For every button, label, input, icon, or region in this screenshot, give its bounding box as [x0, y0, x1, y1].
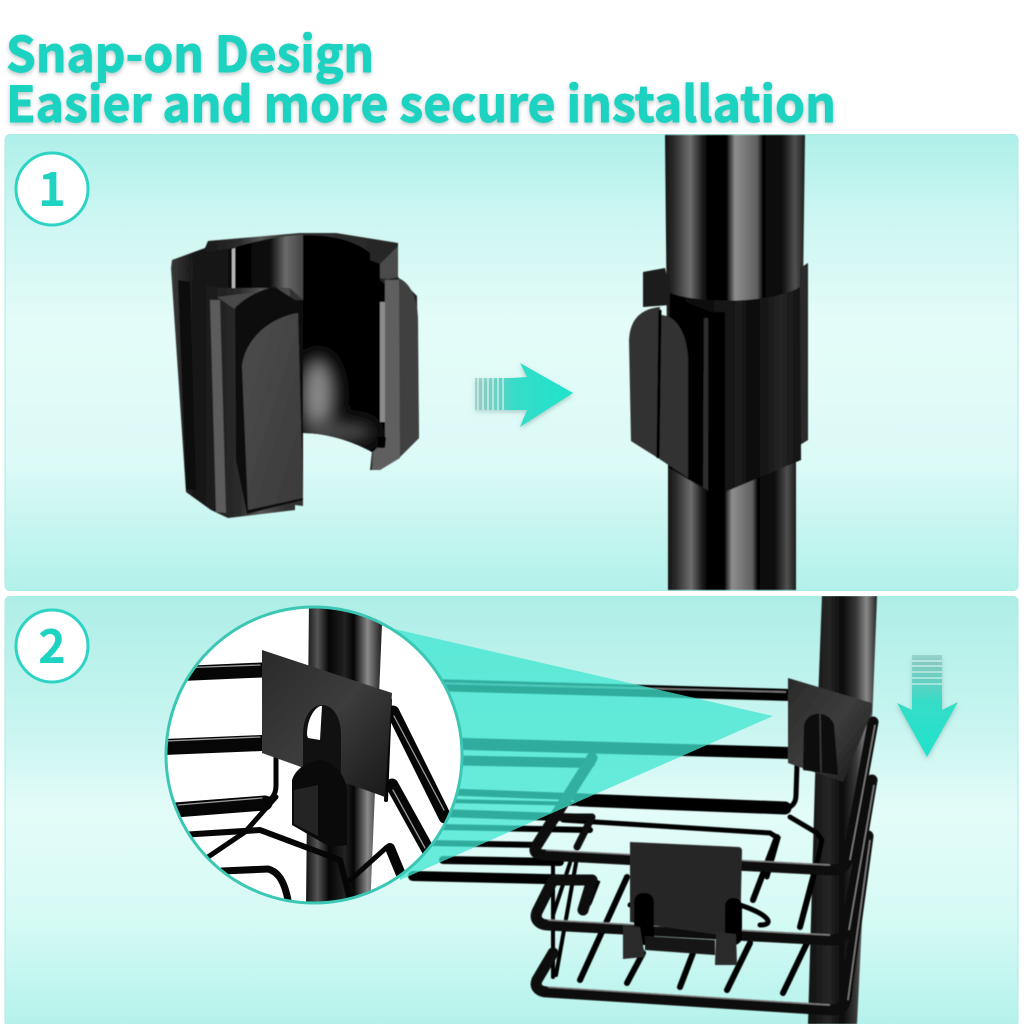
wire shelf unit: [413, 596, 877, 1024]
pole: [808, 596, 877, 1024]
down arrow: [897, 655, 958, 757]
title: [6, 16, 836, 137]
teal magnifier beam: [390, 628, 773, 880]
step 1 badge: 1: [38, 151, 66, 220]
right arrow: [475, 363, 573, 427]
panel 2: [5, 596, 1018, 1024]
front wire basket: [535, 722, 873, 1010]
snap-on clip, open: [171, 233, 419, 518]
step 2 badge: [16, 608, 88, 682]
step 2 badge: 2: [38, 608, 66, 677]
lens contents: [165, 600, 445, 910]
magnifier lens: [165, 600, 462, 910]
upper bracket on pole: [788, 678, 872, 782]
hanging plate with hooks: [623, 842, 742, 965]
lens ring: [166, 607, 462, 903]
title: Easier and more secure installation: [6, 66, 836, 137]
panel 1 background: [5, 134, 1018, 590]
panel 1: [5, 134, 1018, 590]
title: Snap-on Design: [6, 16, 374, 87]
back shelf rods: [413, 685, 822, 993]
panel 2 background: [5, 596, 1018, 1024]
pole with clip installed: [629, 135, 808, 590]
step 1 badge: [16, 151, 88, 225]
